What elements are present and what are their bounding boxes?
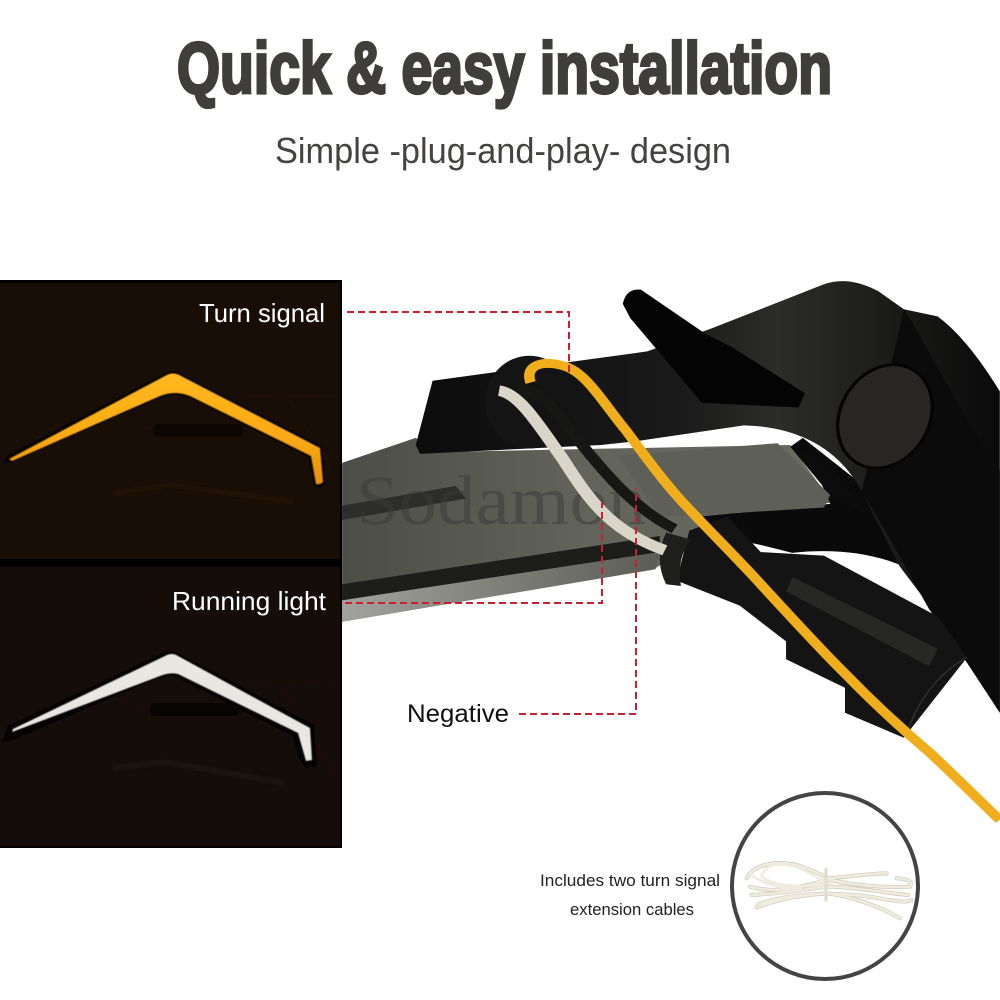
product photo: mirror light unit [342, 281, 1000, 820]
reflection [112, 762, 285, 783]
gray arm [342, 438, 832, 622]
subtitle: Simple -plug-and-play- design [275, 130, 731, 171]
connector [660, 516, 967, 738]
white wire [499, 391, 665, 550]
icon: extension cables in circle [732, 793, 918, 979]
cable caption: extension cables [570, 901, 694, 919]
gray inset panel [618, 443, 830, 516]
panel: running light photo [0, 559, 342, 848]
white light bar [2, 651, 317, 768]
watermark: Sodamon [356, 463, 646, 540]
cable caption: Includes two turn signal [540, 872, 720, 890]
label: turn signal: Turn signal [199, 298, 325, 328]
reflection [112, 485, 295, 502]
top housing [416, 281, 1000, 713]
yellow wire [529, 363, 1000, 820]
label: running light: Running light [172, 586, 327, 616]
lens [822, 354, 947, 479]
black lower band [702, 438, 904, 566]
front strip [862, 309, 1000, 713]
grommet [485, 356, 574, 449]
callout: turn signal line [347, 312, 569, 372]
wires behind amber light [120, 395, 335, 465]
callout: negative line [519, 488, 636, 714]
callout: running light line [345, 502, 602, 603]
panel: turn signal photo [0, 280, 342, 568]
amber light bar [2, 371, 326, 488]
cable caption [540, 872, 720, 919]
mounting tab [623, 289, 805, 407]
black wire [519, 389, 675, 529]
wires behind white light [120, 682, 336, 775]
label: negative: Negative [407, 700, 509, 728]
